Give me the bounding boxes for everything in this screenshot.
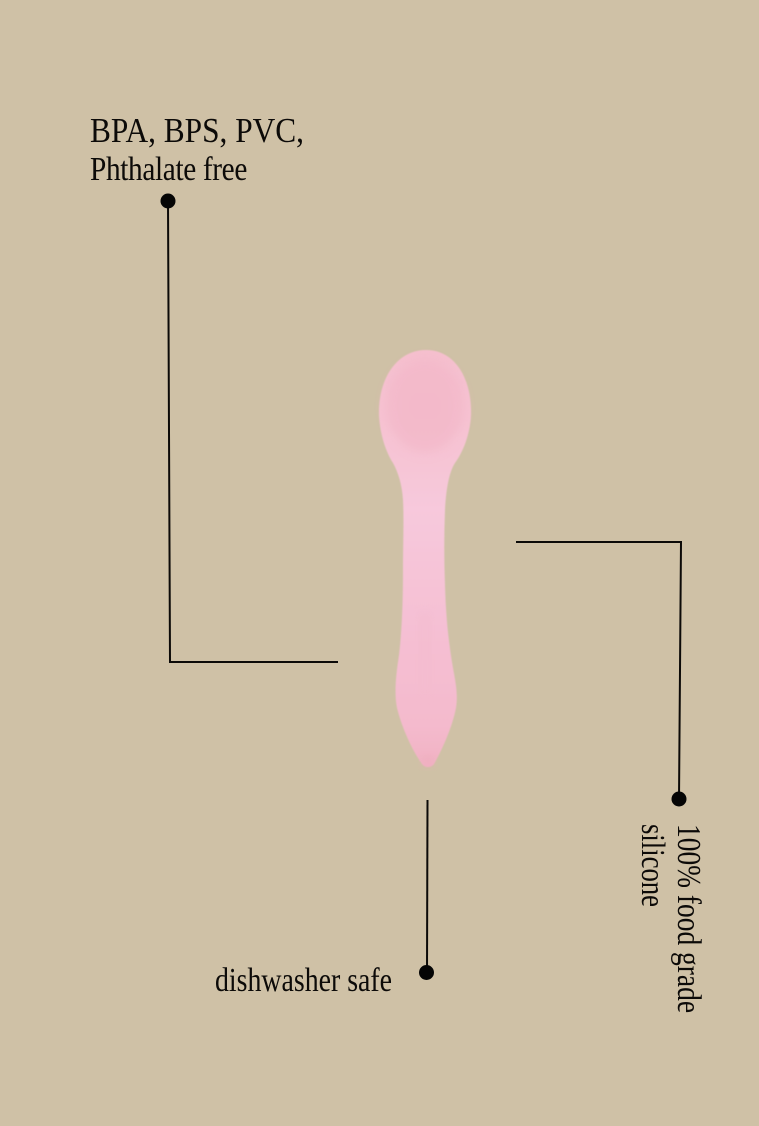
callout text: 100% food grade silicone: 100% food grade	[670, 824, 707, 1013]
callout text: dishwasher safe: dishwasher safe	[215, 962, 392, 999]
callout text: 100% food grade silicone: silicone	[634, 824, 671, 907]
callout: BPA free	[90, 111, 338, 662]
leader dot: dishwasher	[419, 965, 434, 980]
spoon handle embossed mark	[418, 612, 432, 697]
leader dot: food grade	[672, 792, 686, 806]
callout text: BPA, BPS, PVC, Phthalate free: BPA, BPS, PVC,	[90, 111, 304, 150]
callout text: BPA, BPS, PVC, Phthalate free	[90, 111, 304, 188]
callout text: BPA, BPS, PVC, Phthalate free: Phthalate free	[90, 151, 247, 188]
leader line: dishwasher	[426, 800, 428, 972]
callout text: 100% food grade silicone	[634, 824, 707, 1013]
spoon illustration	[379, 350, 471, 767]
spoon tip shade	[422, 755, 434, 767]
callout: food grade silicone	[516, 542, 707, 1013]
leader line: food grade	[516, 542, 681, 799]
leader dot: BPA free	[160, 194, 176, 208]
spoon body	[379, 350, 471, 767]
leader line: BPA free	[168, 201, 338, 662]
callout: dishwasher safe	[215, 800, 434, 999]
spoon bowl hollow	[381, 354, 469, 458]
